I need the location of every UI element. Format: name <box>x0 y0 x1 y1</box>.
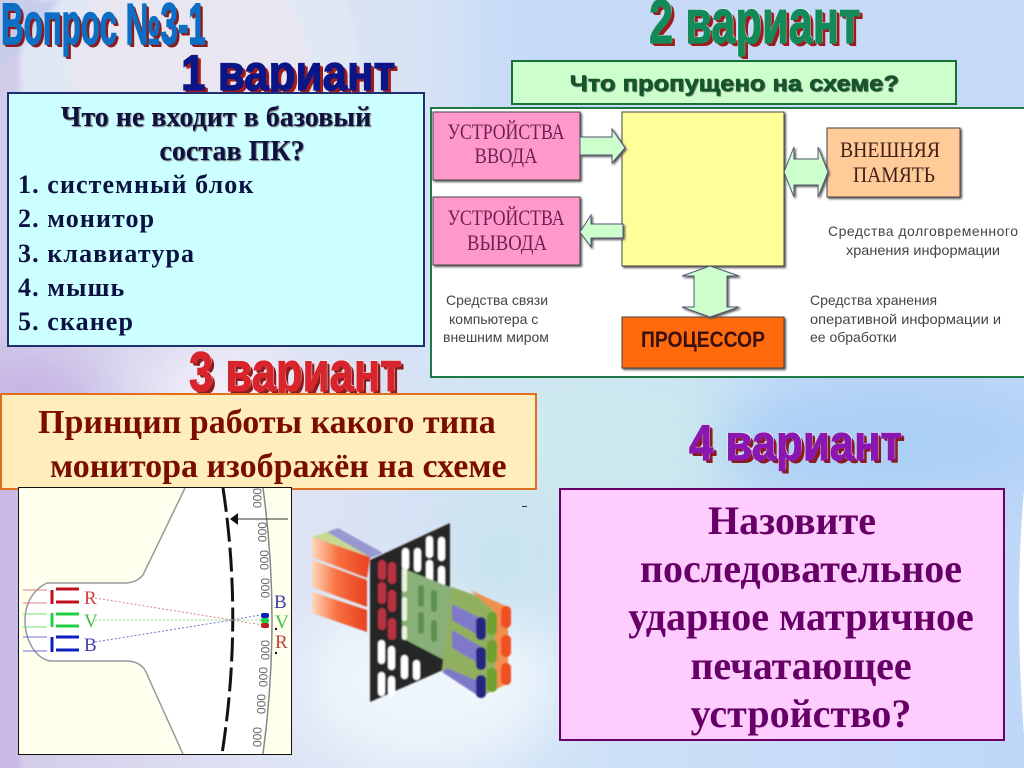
beam labels: B <box>274 592 287 613</box>
phosphor triads: 000 <box>250 727 264 747</box>
panel: что пропущено <box>511 60 957 105</box>
heading: 1 вариант: 1 вариант <box>181 45 395 101</box>
box: устройства ввода: ВВОДА <box>474 143 538 168</box>
panel: что пропущено: Что пропущено на схеме? <box>569 72 899 96</box>
heading: 4 вариант: 4 вариант <box>689 415 902 471</box>
phosphor triads: 000 <box>258 578 272 598</box>
caption: communication: внешним миром <box>443 329 549 345</box>
illustration: shadow mask 3D <box>311 522 512 703</box>
panel: вариант 3 <box>0 393 537 490</box>
box: процессор <box>622 317 784 368</box>
box: устройства ввода <box>433 112 580 180</box>
panel: вариант 4 <box>559 488 1005 741</box>
caption: communication: компьютера с <box>449 311 538 327</box>
caption: operative storage: Средства хранения <box>810 292 937 308</box>
question 1 text <box>61 102 372 167</box>
caption: communication <box>443 292 549 345</box>
beam labels: V <box>275 612 289 633</box>
diagram: CRT kinescope <box>19 488 291 754</box>
answer list <box>18 170 254 336</box>
panel: вариант 4: Назовите <box>708 498 876 543</box>
question 3 text: Принцип работы какого типа <box>38 404 496 441</box>
beam labels: R <box>84 588 97 609</box>
phosphor triads: 000 <box>258 640 272 660</box>
beam labels: V <box>84 611 98 632</box>
panel: вариант 4: устройство? <box>691 691 911 736</box>
beam labels <box>84 588 289 656</box>
answer list: 3. клавиатура <box>18 239 195 268</box>
box: устройства вывода: УСТРОЙСТВА <box>448 205 565 230</box>
panel: computer structure diagram <box>430 107 1024 378</box>
arrow: central block to output <box>580 215 623 247</box>
phosphor triads: 000 <box>257 550 271 570</box>
question 3 text: монитора изображён на схеме <box>50 448 507 485</box>
electron guns <box>23 589 79 652</box>
phosphor triads: 000 <box>250 488 264 508</box>
caption: long-term storage: хранения информации <box>846 242 1000 258</box>
shadow mask <box>222 488 233 754</box>
panel: вариант 4: ударное матричное <box>628 594 974 639</box>
question 3 text <box>38 404 507 485</box>
box: устройства вывода: ВЫВОДА <box>467 230 547 255</box>
panel: вариант 4: последовательное <box>640 546 962 591</box>
panel: вариант 4: печатающее <box>690 643 912 688</box>
convergence dots <box>261 613 277 654</box>
arrow: central block to external memory <box>784 147 828 197</box>
caption: operative storage: ее обработки <box>810 329 897 345</box>
arrow: input to central block <box>580 129 625 163</box>
question 1 text: состав ПК? <box>159 136 305 167</box>
phosphor triads: 000 <box>256 667 270 687</box>
tube body <box>25 488 272 754</box>
caption: communication: Средства связи <box>446 292 548 308</box>
phosphor triads <box>250 488 272 747</box>
phosphor triads: 000 <box>254 694 268 714</box>
heading: 3 вариант: 3 вариант <box>189 340 402 403</box>
box: процессор: ПРОЦЕССОР <box>641 327 765 352</box>
caption: long-term storage: Средства долговременного <box>828 223 1018 239</box>
beams <box>95 598 263 642</box>
question 1 text: Что не входит в базовый <box>61 102 371 133</box>
pointer arrow <box>230 513 288 525</box>
phosphor triads: 000 <box>255 522 269 542</box>
caption: operative storage <box>810 292 1001 345</box>
answer list: 5. сканер <box>18 307 134 336</box>
panel: вариант 1 <box>7 92 425 347</box>
beam labels: R <box>275 632 288 653</box>
box: внешняя память <box>827 128 960 197</box>
answer list: 4. мышь <box>18 273 125 302</box>
arrow: central block to processor <box>682 266 739 317</box>
caption: long-term storage <box>828 223 1018 258</box>
box: внешняя память: ПАМЯТЬ <box>853 162 935 187</box>
box: внешняя память: ВНЕШНЯЯ <box>840 137 940 162</box>
box: устройства ввода: УСТРОЙСТВА <box>448 119 565 144</box>
beam labels: B <box>84 635 97 656</box>
box: устройства вывода <box>433 197 580 265</box>
answer list: 2. монитор <box>18 204 155 233</box>
answer list: 1. системный блок <box>18 170 254 199</box>
caption: operative storage: оперативной информации и <box>810 311 1001 327</box>
box: central yellow block <box>622 112 784 266</box>
dash mark <box>522 506 527 507</box>
